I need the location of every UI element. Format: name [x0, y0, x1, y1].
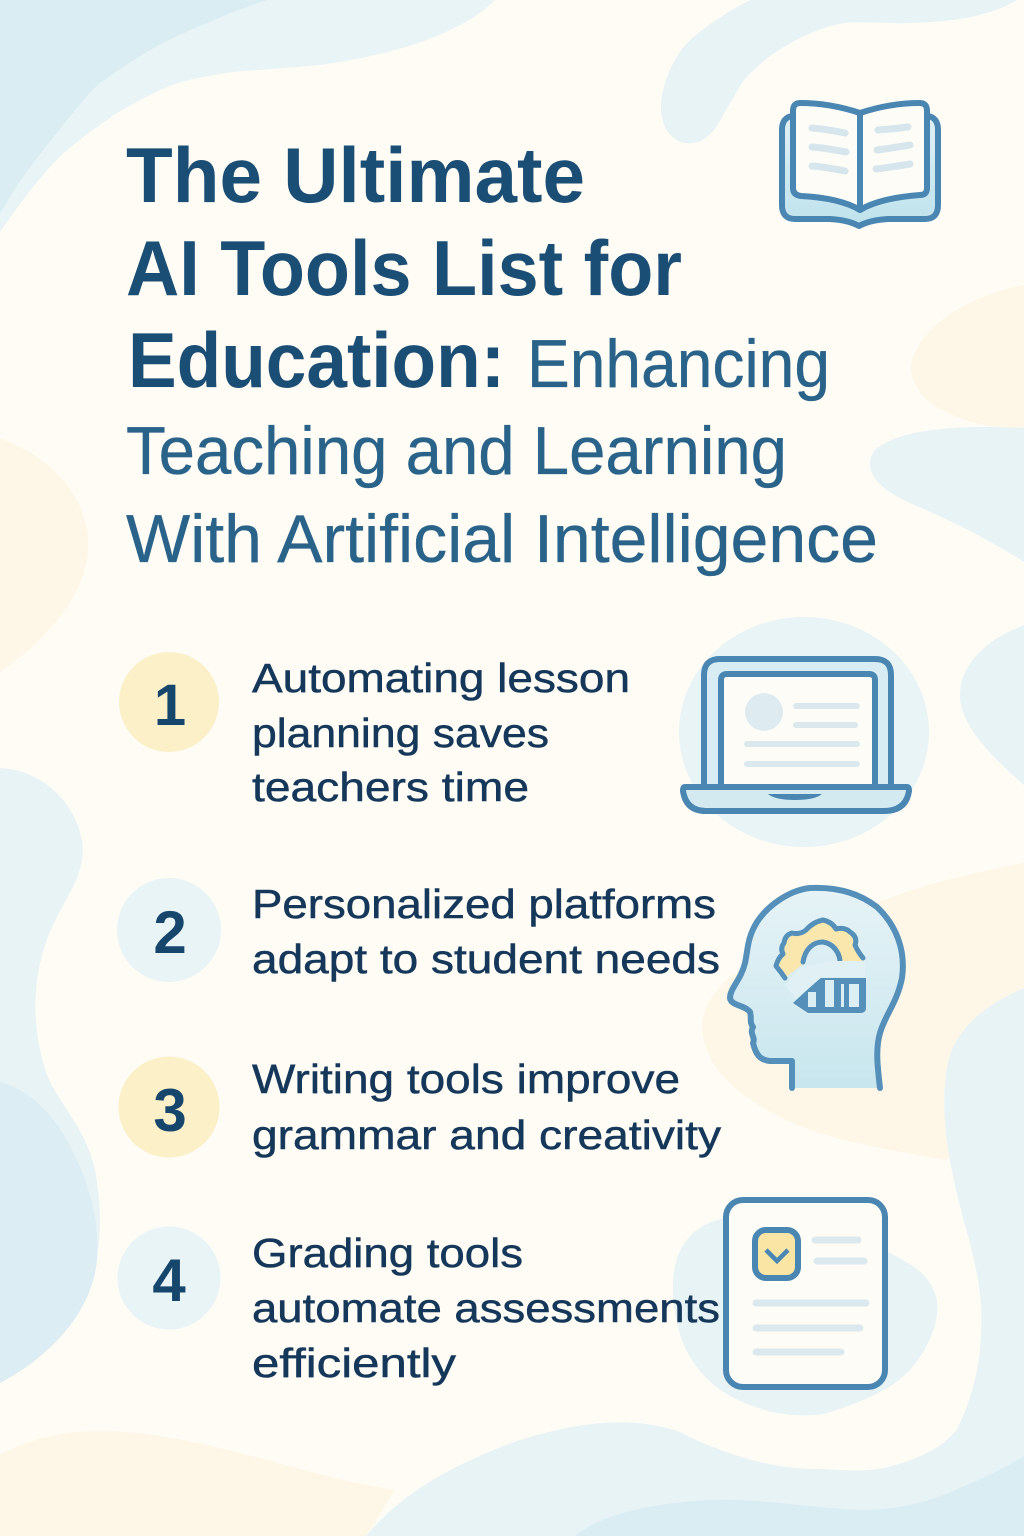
number badge 1	[119, 652, 219, 752]
item 1 text	[252, 655, 630, 810]
icon: laptop	[683, 659, 909, 811]
number badge 3	[118, 1056, 220, 1158]
icon: head with gear and bars	[730, 888, 903, 1088]
title: The Ultimate	[126, 131, 585, 219]
title: Teaching and Learning	[126, 413, 787, 489]
item 4 text: efficiently	[252, 1340, 457, 1386]
document backdrop blob	[673, 1218, 937, 1415]
item 4 text	[252, 1230, 720, 1386]
item 4 text: automate assessments	[252, 1285, 720, 1331]
item 4 text: Grading tools	[252, 1230, 523, 1276]
number badge 4: 4	[152, 1247, 186, 1314]
number badge 4	[118, 1226, 220, 1330]
item 1 text: Automating lesson	[252, 655, 630, 701]
item 2 text: Personalized platforms	[252, 881, 716, 927]
item 3 text	[252, 1056, 722, 1158]
title: Enhancing	[527, 326, 830, 402]
title	[126, 131, 878, 577]
number badge 2: 2	[153, 899, 187, 966]
item 3 text: Writing tools improve	[252, 1056, 680, 1102]
title: AI Tools List for	[126, 224, 682, 312]
item 1 text: teachers time	[252, 764, 529, 810]
item 3 text: grammar and creativity	[252, 1112, 722, 1158]
item 2 text	[252, 881, 720, 982]
title: With Artificial Intelligence	[126, 501, 878, 577]
item 1 text: planning saves	[252, 710, 549, 756]
item 2 text: adapt to student needs	[252, 936, 720, 982]
icon: graded document	[726, 1200, 885, 1387]
icon: open book	[782, 103, 938, 226]
laptop backdrop circle	[679, 617, 929, 847]
number badge 2	[117, 878, 221, 982]
number badge 3: 3	[153, 1077, 187, 1144]
title: Education:	[128, 316, 505, 404]
number badge 1: 1	[154, 673, 186, 738]
